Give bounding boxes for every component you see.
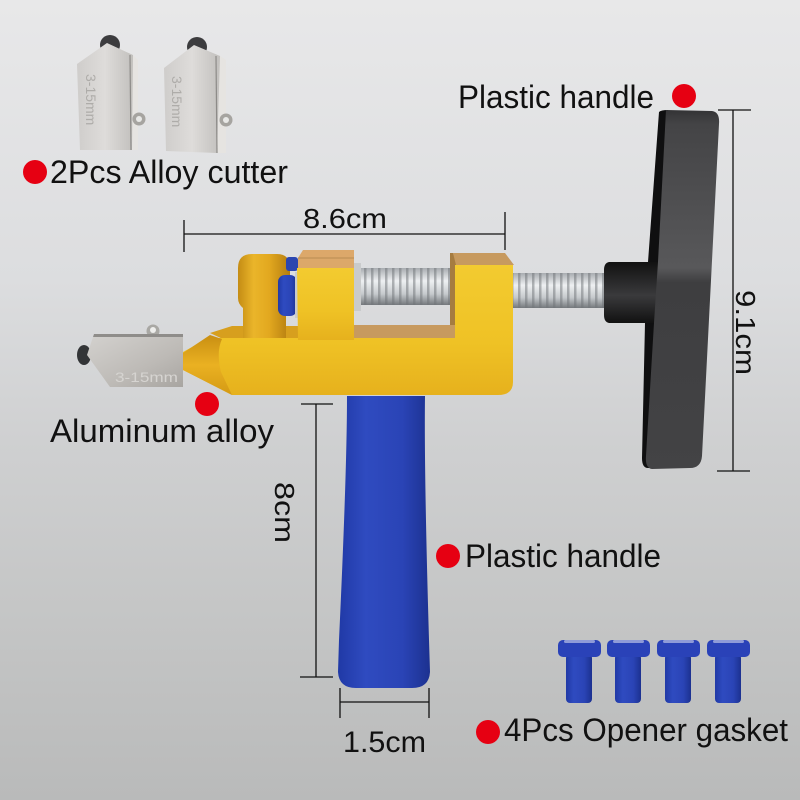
aluminum alloy body [183, 253, 514, 395]
gasket 1 [558, 640, 601, 703]
body main [183, 265, 513, 395]
dimension: 1.5cm [340, 688, 429, 759]
threaded rod outer [513, 273, 606, 308]
callout: 4Pcs Opener gasket: 4Pcs Opener gasket [504, 712, 788, 748]
handle front face [646, 110, 719, 469]
callout: Plastic handle top: Plastic handle [458, 79, 654, 115]
spare alloy cutters [77, 35, 232, 153]
opener gaskets [558, 640, 750, 703]
handle rear edge [642, 110, 672, 468]
mounted cutter head [77, 324, 183, 387]
mounted cutter head: 3-15mm [115, 369, 178, 385]
icon: spare cutter right: 3-15mm [169, 76, 185, 127]
gasket 3 [657, 640, 700, 703]
callout: Plastic handle lower: Plastic handle [465, 538, 661, 574]
threaded rod inner [354, 263, 456, 311]
callout: 2Pcs Alloy cutter: 2Pcs Alloy cutter [50, 154, 288, 190]
dimension: 9.1cm: 9.1cm [730, 290, 761, 375]
slider block [297, 250, 354, 340]
gold post [238, 254, 290, 338]
callout: Aluminum alloy [50, 392, 274, 449]
pointed tip [183, 335, 232, 395]
dimension: 8.6cm: 8.6cm [303, 203, 387, 234]
knob [604, 262, 662, 323]
gasket 2 [607, 640, 650, 703]
icon: spare cutter left [77, 35, 146, 150]
blue button [278, 257, 300, 318]
body top faces [210, 326, 302, 340]
dimension: 1.5cm: 1.5cm [343, 726, 426, 759]
dimension: 8cm: 8cm [269, 482, 300, 543]
dimension: 8cm [269, 404, 333, 677]
inner brown strip [352, 322, 455, 340]
dimension: 8.6cm [184, 203, 505, 252]
black T handle [513, 110, 719, 469]
end top brown [453, 253, 514, 265]
icon: spare cutter left: 3-15mm [83, 74, 99, 125]
dimension: 9.1cm [717, 110, 761, 471]
blue plastic handle [338, 396, 430, 688]
icon: spare cutter right [164, 37, 232, 153]
callout: Aluminum alloy: Aluminum alloy [50, 413, 274, 449]
gasket 4 [707, 640, 750, 703]
